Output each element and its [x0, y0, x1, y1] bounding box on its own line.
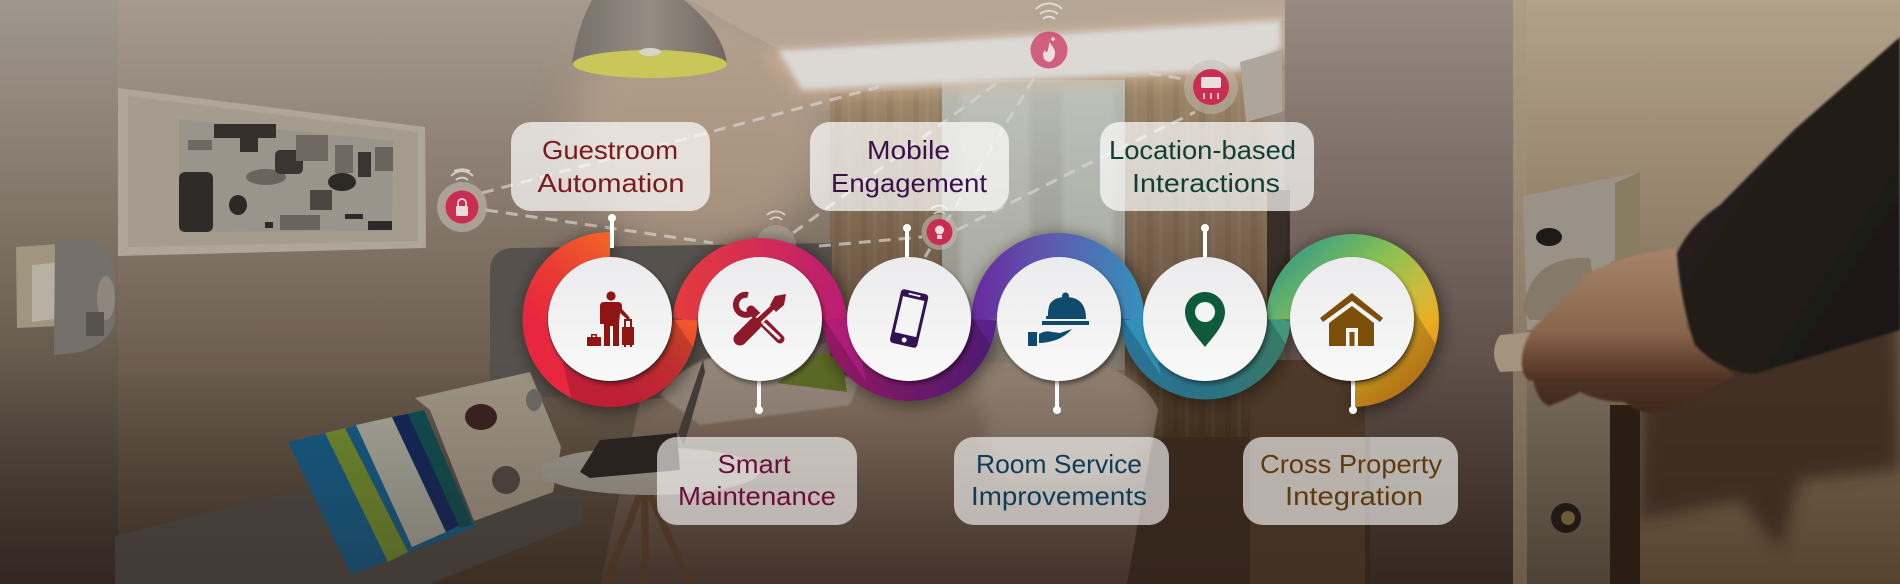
room wall — [0, 0, 1520, 584]
air conditioner — [1240, 50, 1282, 122]
door lock plate — [1523, 172, 1640, 584]
label: Room Service Improvements: Improvements — [971, 481, 1147, 511]
bottom vignette — [0, 360, 1520, 584]
arm shadow on door — [1640, 280, 1900, 550]
window head wall strip — [802, 70, 1290, 110]
right wall — [1285, 0, 1520, 584]
hand — [1522, 248, 1735, 413]
label: Location-based Interactions: Interactions — [1132, 168, 1280, 198]
sensor: air conditioner — [1184, 60, 1238, 114]
bed headboard — [490, 243, 832, 400]
connector: Guestroom Automation — [608, 214, 616, 248]
label: Guestroom Automation: Automation — [538, 168, 684, 198]
sheer highlight two — [1062, 85, 1114, 335]
door edge — [1513, 0, 1527, 584]
label: Smart Maintenance: Smart — [718, 449, 791, 479]
warm wall glow — [570, 10, 830, 250]
sheer curtain — [942, 80, 1125, 370]
white disc 5 — [1143, 257, 1267, 381]
floor — [1100, 437, 1370, 584]
connector: Mobile Engagement — [903, 224, 911, 258]
label: Mobile Engagement: Mobile — [867, 135, 950, 165]
ribbon lobe: crimson — [685, 251, 834, 320]
label: Room Service Improvements — [954, 437, 1169, 525]
label: Location-based Interactions — [1100, 122, 1314, 211]
label: Room Service Improvements: Room Service — [976, 449, 1142, 479]
connector: Room Service — [1053, 380, 1061, 414]
icon: smartphone — [889, 289, 929, 348]
connector: Location-based — [1201, 224, 1209, 258]
ribbon lobe: violet blue — [984, 246, 1132, 320]
icon: traveller with luggage — [587, 291, 634, 347]
ribbon lobe: red — [535, 244, 685, 395]
bed duvet light — [970, 364, 1155, 480]
sofa seat — [115, 488, 584, 584]
label: Mobile Engagement — [810, 122, 1009, 211]
sensor: door lock — [437, 169, 487, 232]
connector: Smart Maintenance — [755, 380, 763, 414]
ribbon lobe: magenta — [834, 320, 984, 388]
painting — [179, 119, 393, 232]
peach glow around band — [760, 14, 1290, 98]
label: Smart Maintenance: Maintenance — [678, 481, 836, 511]
icon: location pin — [1185, 292, 1225, 347]
serpentine ribbon — [535, 244, 1426, 395]
label: Location-based Interactions: Location-based — [1109, 135, 1296, 165]
label: Mobile Engagement: Engagement — [831, 168, 988, 198]
side table legs — [605, 495, 690, 584]
sheer highlights — [960, 85, 1030, 335]
dark gap beside curtain — [1267, 190, 1290, 310]
left wall panel — [0, 0, 118, 584]
sensor: light bulb — [922, 205, 958, 250]
wooden cabinet — [1250, 360, 1365, 584]
white disc 6 — [1290, 257, 1414, 381]
ribbon shadow — [537, 248, 1428, 398]
label: Smart Maintenance — [657, 437, 857, 525]
sleeve — [1677, 37, 1900, 374]
icon: wrench and screwdriver — [736, 294, 786, 339]
sensor: hidden behind ribbon — [756, 211, 796, 265]
ribbon lobe: teal — [1132, 320, 1278, 387]
bed — [600, 363, 1158, 584]
wall switch and thermostat — [16, 240, 115, 355]
white disc 4 — [997, 257, 1121, 381]
ribbon long shadows — [563, 310, 1436, 407]
painting frame — [118, 88, 426, 256]
laptop — [580, 360, 705, 478]
door handle — [1494, 328, 1575, 372]
icon: house — [1320, 293, 1383, 346]
connector: Cross Property — [1349, 380, 1357, 414]
white disc 2 — [698, 257, 822, 381]
label: Cross Property Integration — [1243, 437, 1458, 525]
pendant lamp — [572, 0, 727, 78]
label: Guestroom Automation: Guestroom — [542, 135, 678, 165]
sensor: fire — [1030, 3, 1068, 68]
dashed sensor connection lines — [482, 73, 1195, 257]
left curtain — [830, 88, 942, 420]
frame inner — [128, 96, 418, 247]
dotted pillow — [415, 372, 561, 521]
ribbon lobe: green to amber — [1278, 247, 1426, 395]
blue striped pillow — [288, 410, 475, 575]
door — [1513, 0, 1900, 584]
ceiling — [690, 0, 1300, 48]
right curtain — [1125, 70, 1267, 437]
white disc 3 — [847, 257, 971, 381]
white pillows — [660, 352, 860, 425]
label: Cross Property Integration: Cross Property — [1260, 449, 1442, 479]
white disc 1 — [548, 257, 672, 381]
icon: room service cloche — [1028, 292, 1089, 346]
label: Cross Property Integration: Integration — [1285, 481, 1423, 511]
table top — [540, 447, 760, 495]
label: Guestroom Automation — [511, 122, 710, 211]
lit band above the window — [778, 20, 1281, 90]
green pillow — [777, 353, 847, 392]
